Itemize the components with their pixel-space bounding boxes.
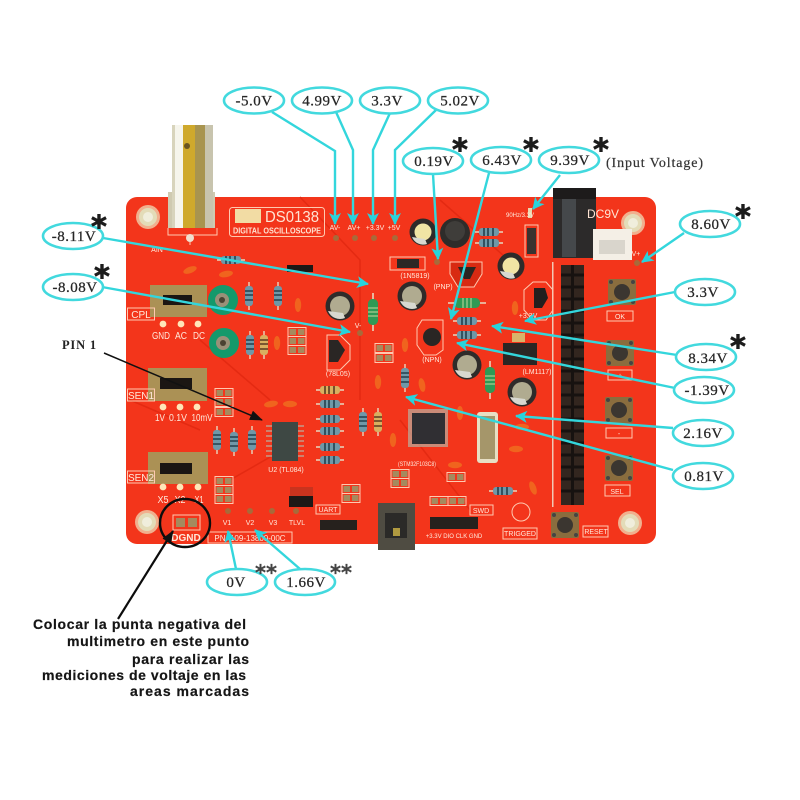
circuit board: [126, 125, 656, 550]
switch labels: CPL: [131, 310, 151, 321]
bottom connectors and labels: UART: [319, 507, 338, 514]
top rail labels: AV+: [348, 225, 360, 232]
callout 2.16V: 2.16V: [683, 426, 723, 442]
mounting holes: [135, 205, 645, 535]
callout 0V: **: [255, 561, 277, 585]
PIN 1 label and arrow: [62, 338, 262, 420]
ICs: TLVL: [289, 520, 305, 527]
callout 4.99V: 4.99V: [302, 94, 342, 110]
callout -5.0V: [224, 88, 335, 224]
callout 0.19V: 0.19V: [414, 154, 454, 170]
callout 8.34V: 8.34V: [688, 351, 728, 367]
instruction note: mediciones de voltaje en las: [42, 667, 246, 683]
input section: jack, header, connector: [525, 188, 640, 507]
push buttons: SEL: [610, 489, 624, 496]
push buttons: +: [618, 373, 622, 380]
callout 8.60V: 8.60V: [691, 217, 731, 233]
ICs: [266, 409, 498, 527]
callout 5.02V: [395, 88, 488, 224]
callout 2.16V: [516, 416, 733, 446]
small silk labels: (78L05): [326, 371, 350, 378]
callout 3.3V top: 3.3V: [371, 94, 403, 110]
logo DS0138: DS0138: [265, 209, 319, 226]
callout -8.11V: *: [91, 210, 107, 245]
electrolytic capacitors: [326, 218, 536, 406]
callout 3.3V right: [525, 279, 735, 321]
top rail labels: +5V: [388, 225, 401, 232]
small silk labels: AIN: [151, 247, 163, 254]
push buttons: OK: [615, 314, 625, 321]
BNC connector: [168, 125, 215, 228]
callout 6.43V: 6.43V: [482, 153, 522, 169]
bottom connectors and labels: DGND: [171, 533, 201, 544]
push buttons: [551, 279, 636, 538]
small silk labels: (1N5819): [400, 273, 430, 280]
callout 0.19V: [403, 133, 468, 259]
switch labels: 0.1V: [169, 413, 187, 424]
DGND circle marker: [160, 499, 210, 547]
callout 8.34V: *: [730, 330, 746, 365]
callout 1.66V: 1.66V: [286, 575, 326, 591]
callout 0V: [207, 531, 277, 595]
resistor packs: [215, 328, 466, 506]
bottom connectors and labels: V3: [269, 520, 277, 527]
small silk labels: +3.3V: [519, 313, 538, 320]
switch labels: X2: [174, 495, 186, 506]
small silk labels: [151, 213, 551, 378]
bottom connectors and labels: V2: [246, 520, 254, 527]
logo DS0138: [230, 208, 324, 236]
callout 4.99V: [292, 88, 353, 224]
top rail labels: [330, 225, 401, 241]
callout -8.08V: [43, 260, 350, 332]
callout 1.66V: [255, 530, 352, 595]
switch labels: X1: [194, 495, 204, 506]
ceramic capacitors: [182, 265, 538, 496]
callout 9.39V input voltage: (Input Voltage): [606, 156, 703, 171]
switch labels: [128, 308, 213, 506]
logo DS0138: DIGITAL OSCILLOSCOPE: [233, 226, 322, 236]
switch labels: X5: [158, 495, 169, 506]
callout -5.0V: -5.0V: [235, 94, 273, 110]
callout 0V: 0V: [226, 575, 246, 591]
bottom connectors and labels: V1: [223, 520, 231, 527]
callout 8.34V: [492, 326, 746, 370]
callout 6.43V: *: [523, 133, 539, 168]
small silk labels: (LM1117): [523, 369, 551, 376]
switch labels: GND: [152, 331, 170, 342]
callout 9.39V input voltage: 9.39V: [550, 153, 590, 169]
small silk labels: (NPN): [422, 357, 442, 364]
callout 3.3V top: [360, 88, 420, 224]
switch labels: AC: [175, 331, 187, 342]
callout 8.60V: *: [735, 200, 751, 235]
callout -1.39V: -1.39V: [684, 383, 730, 399]
small silk labels: 90Hz/3.3V: [506, 213, 534, 219]
callout 3.3V right: 3.3V: [687, 285, 719, 301]
callout 6.43V: [451, 133, 539, 319]
callout -1.39V: [457, 343, 734, 403]
input section: jack, header, connector: V+: [632, 251, 640, 258]
top rail labels: AV-: [330, 225, 341, 232]
push buttons: -: [618, 431, 621, 438]
callout 0.81V: 0.81V: [684, 469, 724, 485]
instruction note: Colocar la punta negativa del: [33, 616, 246, 632]
callout 9.39V input voltage: *: [593, 133, 609, 168]
bottom connectors and labels: +3.3V DIO CLK GND: [426, 534, 483, 540]
instruction note: multimetro en este punto: [67, 633, 249, 649]
callout 9.39V input voltage: [533, 133, 703, 209]
bottom connectors and labels: TRIGGED: [504, 531, 536, 538]
switch labels: DC: [193, 331, 205, 342]
DGND arrow: [118, 531, 173, 619]
small silk labels: (PNP): [433, 284, 453, 291]
callout -8.08V: -8.08V: [52, 280, 98, 296]
callout 1.66V: **: [330, 561, 352, 585]
bottom connectors and labels: SWD: [473, 508, 489, 515]
callout 8.60V: [642, 200, 751, 262]
PIN 1 label and arrow: PIN 1: [62, 338, 97, 352]
callout -8.08V: *: [94, 260, 110, 295]
bottom connectors and labels: RESET: [584, 529, 608, 536]
instruction note: [33, 616, 249, 699]
switch labels: 10mV: [192, 413, 213, 424]
callout 0.19V: *: [452, 133, 468, 168]
switches and trimmers: [148, 285, 239, 484]
callout 5.02V: 5.02V: [440, 94, 480, 110]
small silk labels: V-: [355, 323, 362, 330]
resistors: [213, 228, 517, 495]
callout 0.81V: [406, 397, 733, 489]
top rail labels: +3.3V: [366, 225, 385, 232]
inductors and transistors: [287, 218, 553, 399]
switch labels: SEN2: [128, 473, 154, 484]
bottom connectors and labels: PN: 109-13800-00C: [214, 534, 286, 543]
switch labels: SEN1: [128, 391, 154, 402]
instruction note: para realizar las: [132, 651, 249, 667]
input section: jack, header, connector: DC9V: [587, 207, 619, 221]
callout -8.11V: -8.11V: [52, 229, 96, 245]
instruction note: areas marcadas: [130, 683, 249, 699]
callout -8.11V: [43, 210, 368, 284]
bottom connectors and labels: [171, 503, 608, 550]
ICs: U2 (TL084): [268, 467, 304, 474]
ICs: (STM32F103C8): [398, 462, 436, 468]
switch labels: 1V: [155, 413, 165, 424]
